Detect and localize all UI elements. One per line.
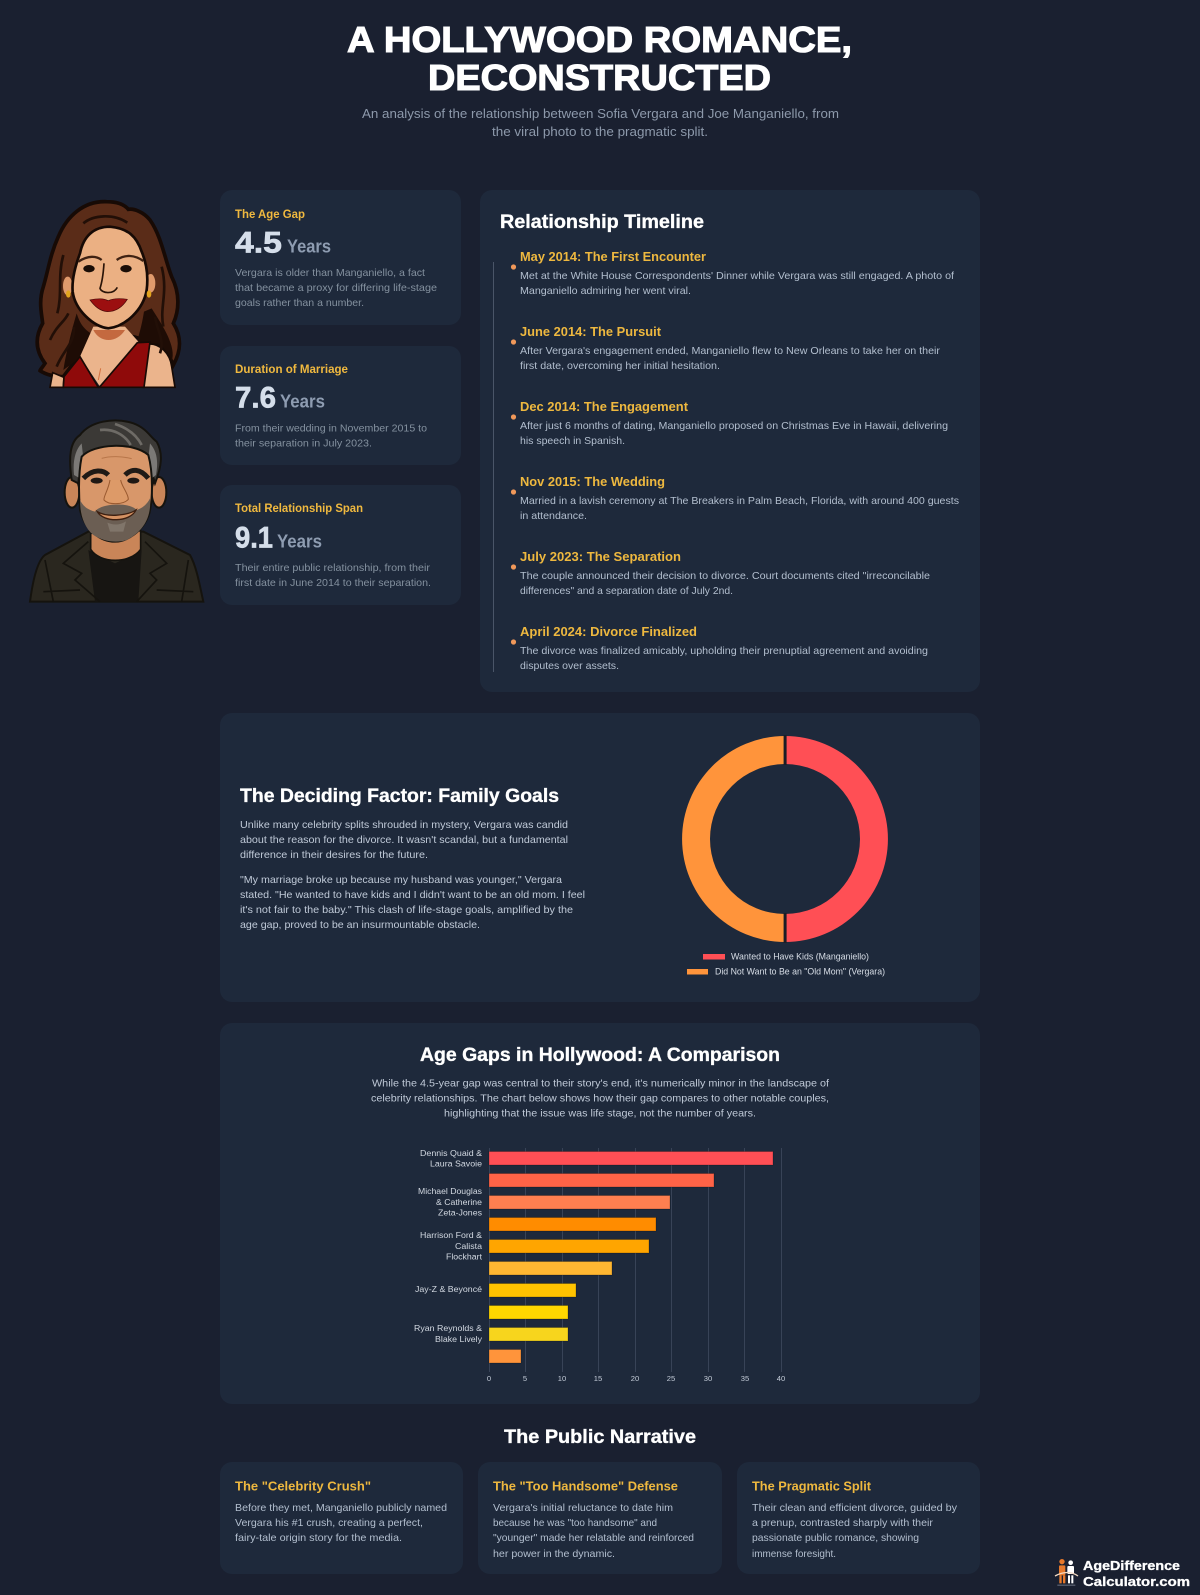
text block: comparison intro: While the 4.5-year gap was central to their story's end, it's numerically minor in the landscape of: [372, 1078, 829, 1090]
timeline entry: June 2014: June 2014: The Pursuit: [520, 325, 662, 339]
timeline entry: Dec 2014: After just 6 months of dating, Manganiello proposed on Christmas Eve in Hawaii, delivering: [520, 421, 948, 432]
bar chart: & Catherine: [436, 1197, 482, 1207]
timeline entry: July 2023: differences" and a separation date of July 2nd.: [520, 586, 733, 597]
panel: the deciding factor: [220, 713, 980, 1002]
panel: duration of marriage: 7.6: [235, 382, 276, 414]
panel: the celebrity crush: [220, 1462, 463, 1574]
panel: the celebrity crush: The "Celebrity Crush": [235, 1480, 371, 1494]
panel: duration of marriage: [220, 346, 461, 465]
panel: the age gap: Vergara is older than Manganiello, a fact: [235, 268, 425, 279]
timeline entry: Nov 2015: Nov 2015: The Wedding: [520, 475, 665, 489]
panel: the too handsome defense: because he was "too handsome" and: [493, 1518, 657, 1529]
bar chart: 30: [704, 1374, 712, 1383]
bar chart: 10: [558, 1374, 566, 1383]
icon: two figures: [1055, 1559, 1078, 1586]
panel: duration of marriage: their separation in July 2023.: [235, 438, 372, 450]
subtitle: An analysis of the relationship between Sofia Vergara and Joe Manganiello, from: [362, 106, 839, 121]
bar chart: [414, 1148, 785, 1383]
timeline entry: April 2024: disputes over assets.: [520, 661, 619, 672]
bar chart: Ryan Reynolds &: [414, 1323, 482, 1333]
panel: the pragmatic split: Their clean and efficient divorce, guided by: [752, 1503, 958, 1514]
bar chart: 20: [631, 1374, 639, 1383]
bar chart: Calista: [455, 1241, 482, 1251]
heading: relationship timeline: Relationship Timeline: [500, 211, 704, 233]
bar chart: Jay-Z & Beyoncé: [415, 1284, 482, 1294]
text block: quote: stated. "He wanted to have kids and I didn't want to be an old mom. I feel: [240, 890, 585, 901]
timeline entry: June 2014: [511, 325, 941, 372]
panel: the age gap: Years: [287, 236, 331, 256]
panel: duration of marriage: From their wedding in November 2015 to: [235, 424, 427, 434]
timeline entry: April 2024: April 2024: Divorce Finalized: [520, 625, 697, 639]
timeline entry: June 2014: first date, overcoming her initial hesitation.: [520, 361, 720, 372]
timeline entry: Nov 2015: Married in a lavish ceremony at The Breakers in Palm Beach, Florida, with around 400 guests: [520, 496, 959, 507]
bar chart: Dennis Quaid &: [420, 1148, 482, 1158]
logo: age difference calculator: [1055, 1558, 1190, 1589]
bar chart: Blake Lively: [435, 1334, 483, 1344]
panel: the pragmatic split: [737, 1462, 980, 1574]
text block: comparison intro: highlighting that the issue was life stage, not the number of years.: [444, 1108, 756, 1120]
timeline entry: Dec 2014: Dec 2014: The Engagement: [520, 400, 689, 414]
heading: the deciding factor: The Deciding Factor: Family Goals: [240, 785, 559, 807]
bar chart: 40: [777, 1374, 785, 1383]
panel: relationship timeline: [480, 190, 980, 692]
chart legend: Did Not Want to Be an "Old Mom" (Vergara): [715, 966, 885, 976]
bar chart: Michael Douglas: [418, 1186, 482, 1196]
text block: candid reason: [240, 820, 568, 861]
text block: candid reason: about the reason for the divorce. It wasn't scandal, but a fundamental: [240, 835, 568, 846]
text block: quote: "My marriage broke up because my husband was younger," Vergara: [240, 875, 562, 886]
title: DECONSTRUCTED: [428, 57, 771, 98]
timeline entry: April 2024: [511, 625, 928, 672]
timeline entry: July 2023: [511, 550, 930, 597]
timeline entry: June 2014: After Vergara's engagement ended, Manganiello flew to New Orleans to take her on their: [520, 346, 941, 357]
panel: the celebrity crush: fairy-tale origin story for the media.: [235, 1533, 402, 1544]
panel: the too handsome defense: "younger" made her relatable and reinforced: [493, 1533, 694, 1544]
text block: candid reason: Unlike many celebrity splits shrouded in mystery, Vergara was candid: [240, 820, 568, 831]
timeline entry: Nov 2015: [511, 475, 959, 522]
text block: quote: it's not fair to the baby." This clash of life-stage goals, amplified by the: [240, 905, 573, 916]
panel: total relationship span: [220, 485, 461, 605]
bar chart: Flockhart: [446, 1252, 483, 1262]
panel: the age gap: The Age Gap: [235, 209, 305, 221]
timeline entry: Dec 2014: his speech in Spanish.: [520, 436, 625, 447]
panel: total relationship span: Their entire public relationship, from their: [235, 563, 431, 574]
panel: total relationship span: 9.1: [235, 522, 273, 554]
icon: portrait of Sofia Vergara: [37, 202, 180, 387]
timeline entry: April 2024: The divorce was finalized amicably, upholding their prenuptial agreement and avoiding: [520, 646, 928, 657]
subtitle: the viral photo to the pragmatic split.: [492, 124, 708, 139]
panel: the pragmatic split: a prenup, contrasted sharply with their: [752, 1518, 934, 1529]
text block: comparison intro: celebrity relationships. The chart below shows how their gap compares to other notable couples,: [371, 1094, 829, 1104]
panel: age gaps comparison: [220, 1023, 980, 1404]
subtitle: [362, 106, 839, 139]
timeline entry: Dec 2014: [511, 400, 948, 447]
timeline entry: July 2023: The couple announced their decision to divorce. Court documents cited "irreconcilable: [520, 571, 930, 582]
logo: age difference calculator: Calculator.com: [1083, 1574, 1190, 1589]
panel: the pragmatic split: immense foresight.: [752, 1549, 836, 1560]
heading: age gaps in hollywood: Age Gaps in Hollywood: A Comparison: [420, 1044, 780, 1066]
panel: total relationship span: Total Relationship Span: [235, 503, 363, 515]
logo: age difference calculator: AgeDifference: [1083, 1558, 1180, 1573]
panel: the age gap: [220, 190, 461, 325]
title: [347, 19, 852, 98]
panel: the celebrity crush: Before they met, Manganiello publicly named: [235, 1503, 447, 1514]
bar chart: 35: [741, 1374, 749, 1383]
chart legend: Wanted to Have Kids (Manganiello): [731, 952, 869, 962]
panel: total relationship span: Years: [277, 532, 322, 552]
donut chart: [682, 735, 888, 943]
text block: quote: age gap, proved to be an insurmountable obstacle.: [240, 920, 480, 931]
panel: the age gap: goals rather than a number.: [235, 298, 364, 309]
panel: the too handsome defense: The "Too Handsome" Defense: [493, 1480, 678, 1494]
title: A HOLLYWOOD ROMANCE,: [347, 19, 852, 60]
timeline entry: May 2014: Met at the White House Correspondents' Dinner while Vergara was still engaged. A photo of: [520, 271, 954, 282]
icon: portrait of Joe Manganiello: [30, 420, 203, 602]
bar chart: 0: [487, 1374, 491, 1383]
panel: the age gap: 4.5: [235, 226, 282, 260]
bar chart: Zeta-Jones: [438, 1208, 482, 1218]
panel: duration of marriage: Duration of Marriage: [235, 364, 348, 376]
text block: candid reason: difference in their desires for the future.: [240, 850, 428, 861]
timeline entry: Nov 2015: in attendance.: [520, 511, 587, 522]
panel: duration of marriage: Years: [280, 392, 325, 412]
chart legend: [687, 952, 885, 976]
panel: the pragmatic split: passionate public romance, showing: [752, 1533, 919, 1544]
bar chart: 15: [594, 1374, 602, 1383]
panel: the celebrity crush: Vergara his #1 crush, creating a perfect,: [235, 1518, 423, 1529]
bar chart: Laura Savoie: [430, 1158, 482, 1168]
panel: the too handsome defense: [478, 1462, 722, 1574]
timeline entry: July 2023: July 2023: The Separation: [520, 550, 681, 564]
panel: the too handsome defense: Vergara's initial reluctance to date him: [493, 1503, 673, 1514]
timeline entry: May 2014: [511, 250, 954, 297]
bar chart: Harrison Ford &: [420, 1230, 482, 1240]
panel: the pragmatic split: The Pragmatic Split: [752, 1480, 872, 1494]
panel: total relationship span: first date in June 2014 to their separation.: [235, 578, 431, 589]
timeline entry: May 2014: May 2014: The First Encounter: [520, 250, 706, 264]
text block: comparison intro: [371, 1078, 829, 1120]
panel: the age gap: that became a proxy for differing life-stage: [235, 283, 437, 294]
text block: quote: [240, 875, 585, 931]
panel: the too handsome defense: her power in the dynamic.: [493, 1549, 615, 1560]
bar chart: 25: [667, 1374, 675, 1383]
heading: the public narrative: The Public Narrative: [504, 1426, 696, 1448]
bar chart: 5: [523, 1374, 527, 1383]
timeline entry: May 2014: Manganiello admiring her went viral.: [520, 286, 691, 297]
